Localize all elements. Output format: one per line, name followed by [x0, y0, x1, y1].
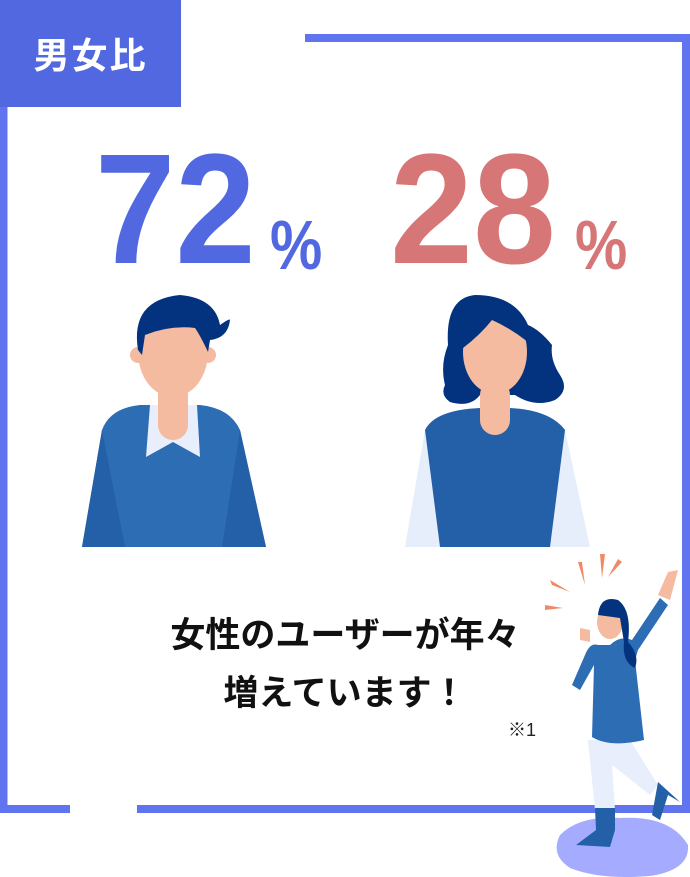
footnote: ※1 — [508, 720, 536, 740]
message text — [170, 607, 520, 716]
message text: 増えています！ — [223, 665, 467, 716]
illustration: cheering woman — [545, 554, 688, 877]
stat: male 72%: % — [270, 206, 322, 284]
message text: 女性のユーザーが年々 — [170, 607, 520, 658]
icon: woman — [405, 295, 590, 547]
icon: man — [82, 295, 266, 547]
stat: female 28%: % — [575, 206, 627, 284]
stat: male 72%: 72 — [95, 122, 256, 297]
title tag: 男女比 — [33, 27, 148, 79]
title tag — [0, 0, 181, 107]
stat: female 28%: 28 — [390, 122, 556, 297]
stat: female 28% — [390, 122, 627, 297]
